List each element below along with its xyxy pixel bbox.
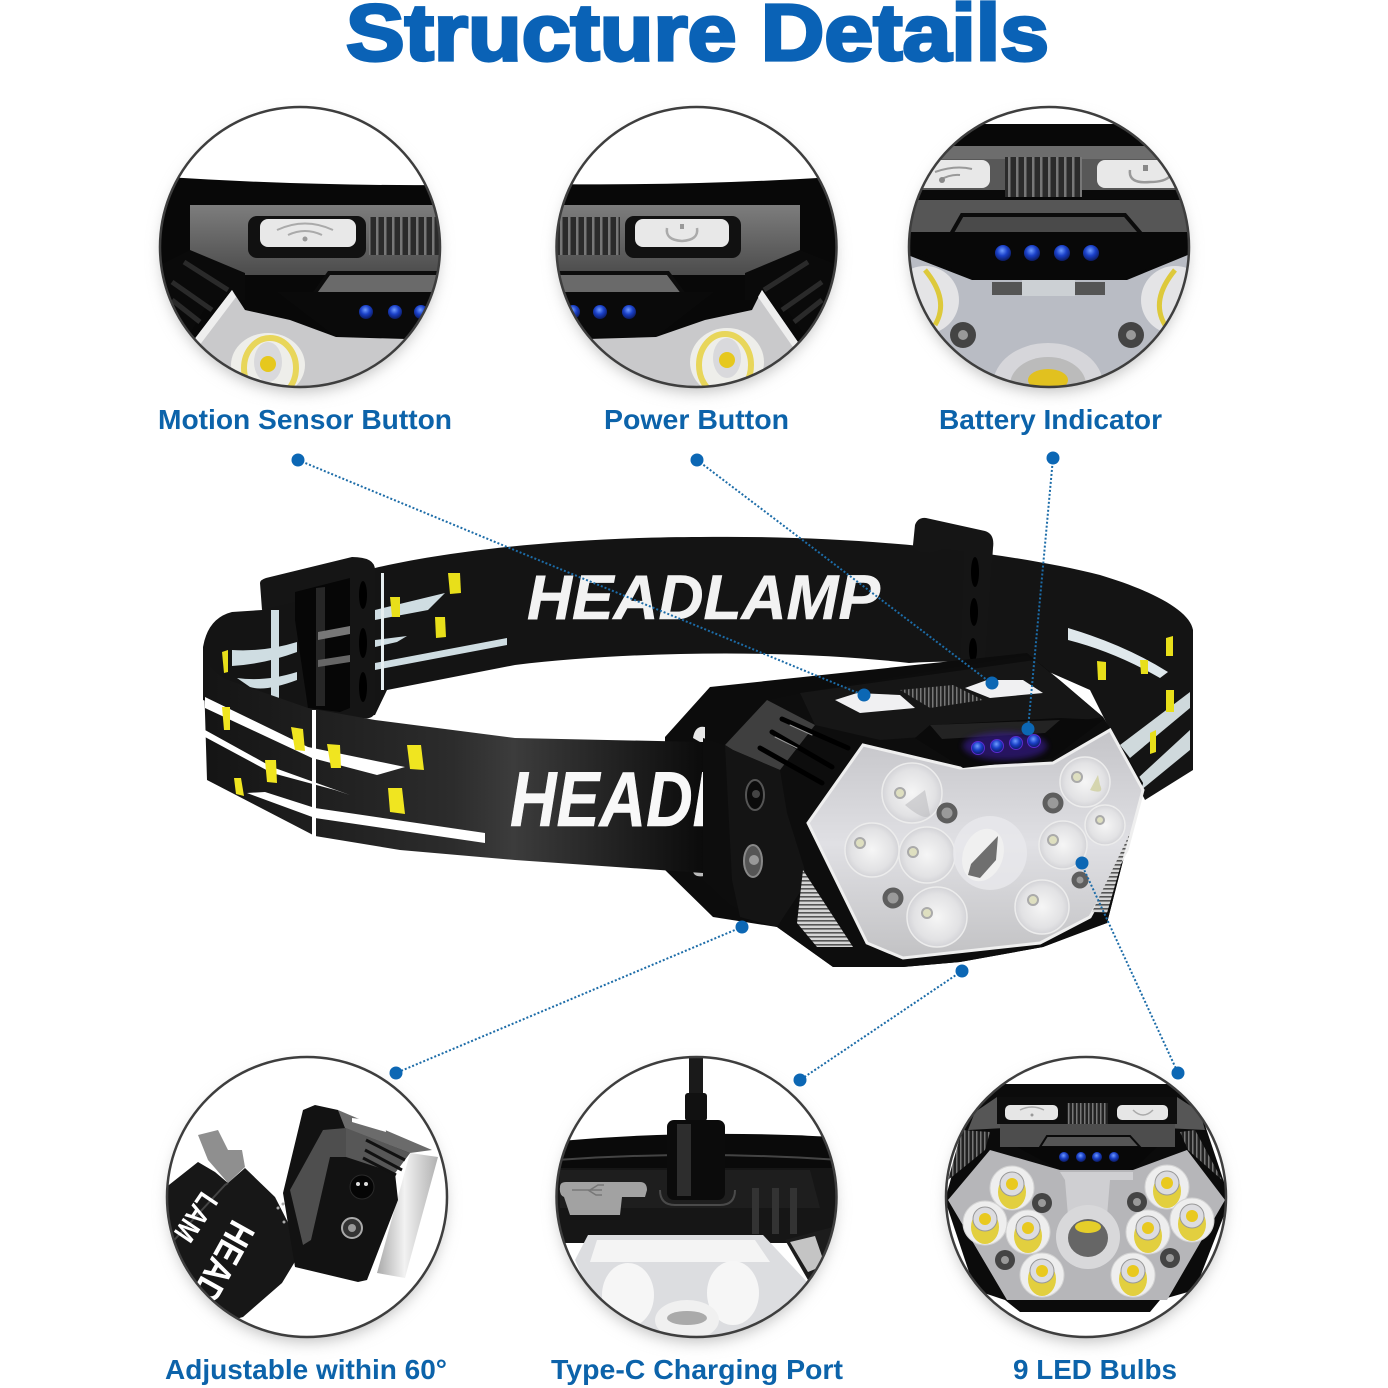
- icon: center LED: [1056, 1205, 1120, 1269]
- icon: sensors: [342, 1175, 374, 1238]
- side vents: [948, 1130, 990, 1180]
- side upper facet: [725, 700, 815, 770]
- lens area: [575, 1235, 808, 1340]
- icon: side sensors: [744, 780, 764, 877]
- icon: small rings: [885, 795, 1086, 906]
- label: adjustable within 60 degrees: Adjustable within 60°: [165, 1354, 447, 1385]
- buckle: right slider: [913, 518, 993, 668]
- panel: type-c charging port detail: [550, 1050, 850, 1341]
- icon: LED bulbs: [845, 757, 1125, 947]
- icon: LEDs: [602, 1261, 759, 1340]
- lamp body: [703, 655, 1143, 967]
- icon: blue indicator lights: [566, 305, 636, 319]
- icon: usb-c plug: [660, 1050, 735, 1205]
- icon: central lens: [953, 816, 1027, 890]
- icon: side vents: [760, 719, 848, 783]
- label: motion sensor button: Motion Sensor Button: [158, 404, 452, 435]
- strap: [168, 1162, 294, 1318]
- strap text: HEAD front: HEADL: [510, 755, 732, 843]
- icon: power button: [1117, 1105, 1168, 1120]
- panel: power button detail: [550, 107, 850, 400]
- label: power button: Power Button: [604, 404, 789, 435]
- label: type-c charging port: Type-C Charging Port: [551, 1354, 843, 1385]
- panel: battery indicator detail: [903, 106, 1195, 400]
- label: 9 LED bulbs: 9 LED Bulbs: [1013, 1354, 1177, 1385]
- headband: front strap: [203, 647, 703, 873]
- lens: [808, 730, 1143, 958]
- icon: LED bulb: [231, 333, 305, 386]
- label: battery indicator: Battery Indicator: [939, 404, 1162, 435]
- icon: center LED: [995, 343, 1102, 386]
- icon: mesh vents: [797, 833, 1130, 947]
- strap: LAM: [167, 1186, 224, 1248]
- icon: dark rings: [995, 1192, 1180, 1270]
- strap: HEAD: [183, 1214, 262, 1309]
- icon: blue indicator lights: [995, 245, 1099, 261]
- lamp side: [283, 1105, 410, 1282]
- lamp rear bracket: [665, 653, 1143, 967]
- lamp top: [338, 1110, 432, 1153]
- icon: motion button: [1005, 1105, 1058, 1120]
- icon: power button: [1097, 160, 1174, 188]
- top face with buttons: [800, 660, 1103, 740]
- lens: [948, 1150, 1225, 1300]
- icon: LED bulb: [690, 328, 764, 386]
- callout lines: [298, 458, 1178, 1080]
- icon: eight LED bulbs: [963, 1165, 1214, 1297]
- icon: blue indicator lights: [1059, 1152, 1119, 1162]
- icon: rubber port cap: [560, 1182, 647, 1215]
- lens edge: [377, 1153, 438, 1278]
- icon: motion sensor button: [260, 219, 356, 247]
- headband: rear loop: [203, 537, 1193, 800]
- icon: grey strap clip: [198, 1130, 245, 1183]
- icon: motion button: [924, 160, 990, 188]
- icon: blue indicator lights: [359, 305, 428, 319]
- buckle: left slider: [260, 557, 375, 718]
- panel: motion sensor button detail: [150, 107, 441, 400]
- panel: 9 LED bulbs detail: [945, 1057, 1230, 1341]
- strap text: HEADLAMP rear: HEADLAMP: [527, 563, 881, 633]
- panel: adjustable angle detail: [160, 1057, 447, 1341]
- headlamp illustration: [203, 518, 1193, 967]
- indicator panel: [915, 718, 1103, 768]
- callout dots: [292, 452, 1184, 1086]
- icon: power button: [635, 219, 729, 247]
